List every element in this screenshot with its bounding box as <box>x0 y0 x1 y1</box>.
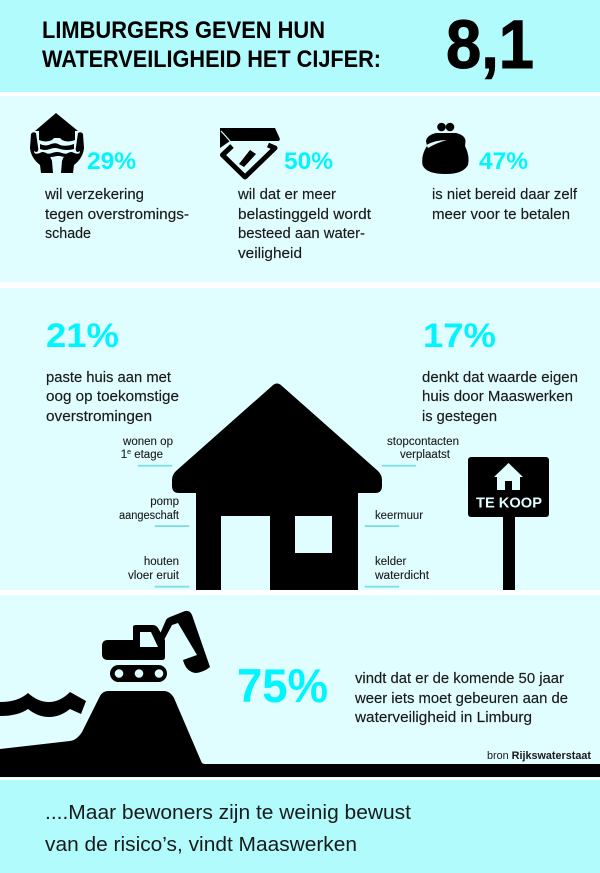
panel: header <box>0 0 600 92</box>
text: komende 50 jaar <box>354 671 568 726</box>
title: LIMBURGERS GEVEN HUN <box>42 17 325 44</box>
text: komende 50 jaar: waterveiligheid in Limburg <box>354 710 532 726</box>
label: kelder waterdicht <box>365 556 430 587</box>
text: komende 50 jaar: vindt dat er de komende 50 jaar <box>355 671 564 687</box>
text: verzekering <box>44 187 189 242</box>
stat 50%: 50% <box>284 148 333 175</box>
stat 21%: 21% <box>46 317 119 355</box>
text: paste huis aan: paste huis aan met <box>46 370 171 386</box>
house <box>172 384 382 590</box>
label: houten vloer eruit <box>128 556 189 587</box>
label: pomp aangeschaft <box>119 496 189 527</box>
label: wonen op 1e etage: 1 <box>121 449 127 461</box>
footer text: van de risico’s, vindt Maaswerken <box>45 833 357 856</box>
text: paste huis aan <box>46 370 179 425</box>
stat 29%: 29% <box>87 148 136 175</box>
text: verzekering: tegen overstromings- <box>45 207 189 223</box>
text: belastinggeld: besteed aan water- <box>238 226 365 242</box>
icon: tax envelope <box>220 128 280 177</box>
label: kelder waterdicht: kelder <box>375 556 406 568</box>
footer text <box>45 801 411 856</box>
label: stopcontacten verplaatst: verplaatst <box>400 449 451 461</box>
for-sale sign <box>468 457 549 590</box>
left labels <box>119 436 189 587</box>
sign text: TE KOOP <box>476 494 542 512</box>
icon: hands holding flooded house <box>30 113 84 173</box>
label: kelder waterdicht: waterdicht <box>374 570 430 582</box>
stat 17%: 17% <box>423 317 496 355</box>
text: waarde eigen huis: denkt dat waarde eigen <box>422 370 578 386</box>
icon part: right hand <box>61 132 84 173</box>
text: belastinggeld: belastinggeld wordt <box>238 207 371 223</box>
text: waarde eigen huis: huis door Maaswerken <box>422 389 573 405</box>
stat 75%: 75% <box>237 659 328 712</box>
panel: three statistics <box>0 96 600 282</box>
text: verzekering: schade <box>45 226 91 242</box>
text: paste huis aan: overstromingen <box>46 409 152 425</box>
water wave <box>0 692 86 717</box>
footer text: ....Maar bewoners zijn te weinig bewust <box>45 801 411 824</box>
panel: housing <box>0 288 600 590</box>
icon part: left hand <box>30 132 53 173</box>
text: niet bereid: is niet bereid daar zelf <box>432 187 578 203</box>
icon: excavator <box>102 611 210 682</box>
icon: coin purse <box>422 123 469 174</box>
icon: small house <box>494 463 523 490</box>
label: houten vloer eruit: vloer eruit <box>128 570 180 582</box>
text: paste huis aan: oog op toekomstige <box>46 389 179 405</box>
label: wonen op 1e etage: etage <box>131 449 163 461</box>
text: verzekering: wil verzekering <box>44 187 144 203</box>
text: belastinggeld: veiligheid <box>238 246 302 262</box>
score 8,1: 8,1 <box>446 6 534 83</box>
label: houten vloer eruit: houten <box>144 556 179 568</box>
title: WATERVEILIGHEID HET CIJFER: <box>42 46 381 73</box>
label: stopcontacten verplaatst: stopcontacten <box>387 436 459 448</box>
label: stopcontacten verplaatst <box>382 436 459 466</box>
right labels <box>365 436 459 587</box>
dike silhouette <box>0 691 600 777</box>
text: waarde eigen huis <box>422 370 578 425</box>
text: belastinggeld: wil dat er meer <box>237 187 336 203</box>
source: bron Rijkswaterstaat <box>487 750 591 762</box>
title <box>42 17 381 73</box>
label: pomp aangeschaft: aangeschaft <box>119 510 180 522</box>
text: waarde eigen huis: is gestegen <box>422 409 497 425</box>
text: niet bereid: meer voor te betalen <box>432 207 570 223</box>
text: komende 50 jaar: weer iets moet gebeuren aan de <box>354 691 568 707</box>
label: wonen op 1e etage: wonen op <box>122 436 173 448</box>
label: wonen op 1e etage: e <box>127 449 131 456</box>
panel: dike <box>0 595 600 778</box>
label: wonen op 1e etage <box>121 436 173 466</box>
label: pomp aangeschaft: pomp <box>150 496 179 508</box>
text: belastinggeld <box>237 187 371 262</box>
label: keermuur: keermuur <box>375 510 423 522</box>
label: keermuur <box>365 510 423 527</box>
panel: footer <box>0 780 600 873</box>
stat 47%: 47% <box>479 148 528 175</box>
text: niet bereid <box>432 187 578 223</box>
